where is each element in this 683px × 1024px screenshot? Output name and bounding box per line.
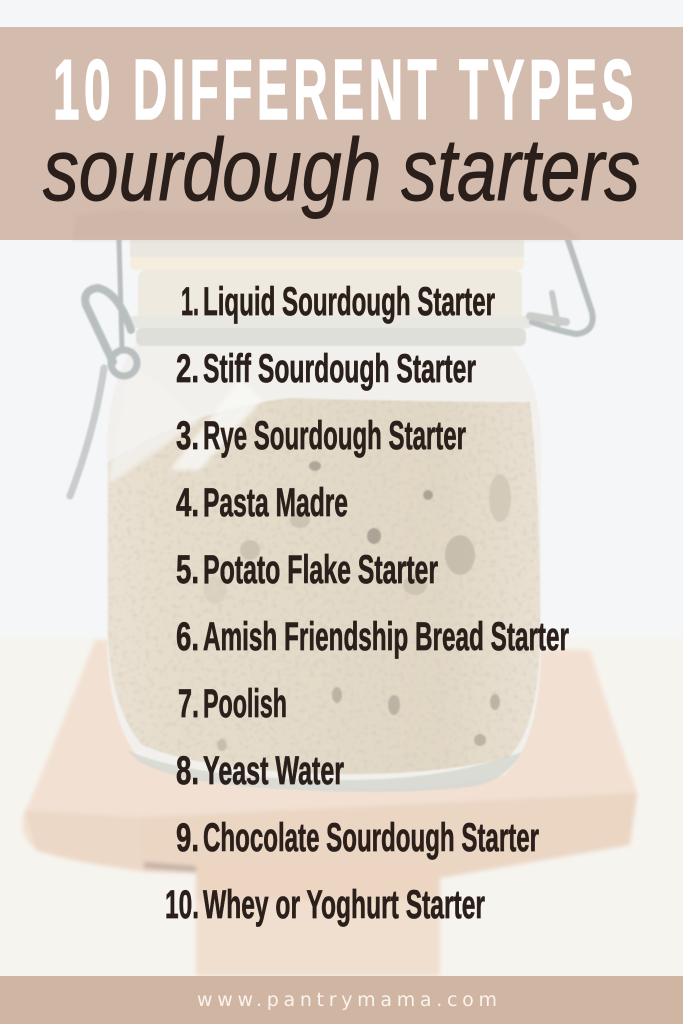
dough	[100, 390, 550, 790]
list item 10: Whey or Yoghurt Starter	[203, 883, 485, 927]
list item 8	[176, 749, 344, 793]
list item 5	[176, 548, 438, 592]
jar body	[107, 345, 541, 790]
jar neck	[138, 270, 522, 330]
list item 6: 6.	[176, 615, 199, 659]
glass highlight	[108, 360, 200, 485]
list item 5: Potato Flake Starter	[203, 548, 438, 592]
list item 8: 8.	[176, 749, 199, 793]
list item 2: 2.	[176, 347, 199, 391]
lid	[130, 240, 524, 257]
list item 4: 4.	[176, 481, 199, 525]
list item 10	[165, 883, 485, 927]
list item 4: Pasta Madre	[203, 481, 348, 525]
footer url: www.pantrymama.com	[197, 989, 497, 1011]
list item 1	[181, 280, 495, 324]
list item 3	[176, 414, 466, 458]
list item 5: 5.	[176, 548, 199, 592]
list item 4	[176, 481, 348, 525]
list item 2: Stiff Sourdough Starter	[203, 347, 476, 391]
footer bar	[0, 976, 683, 1024]
jar base glass	[126, 750, 522, 792]
wire clasp: right	[530, 240, 593, 334]
list item 8: Yeast Water	[203, 749, 344, 793]
list item 3: Rye Sourdough Starter	[203, 414, 466, 458]
list item 2	[176, 347, 476, 391]
list item 10: 10.	[165, 883, 199, 927]
list item 7: Poolish	[203, 682, 287, 726]
rubber seal	[130, 256, 524, 270]
wire clasp: left	[70, 240, 137, 496]
wooden board	[22, 640, 638, 976]
list item 7: 7.	[178, 682, 199, 726]
list item 1: 1.	[181, 280, 199, 324]
jar shadow through banner	[72, 210, 580, 240]
glass jar	[100, 240, 550, 792]
list item 7	[178, 682, 287, 726]
list item 9: 9.	[176, 816, 199, 860]
title banner	[0, 27, 683, 240]
list item 1: Liquid Sourdough Starter	[203, 280, 495, 324]
list item 3: 3.	[176, 414, 199, 458]
list item 9	[176, 816, 539, 860]
